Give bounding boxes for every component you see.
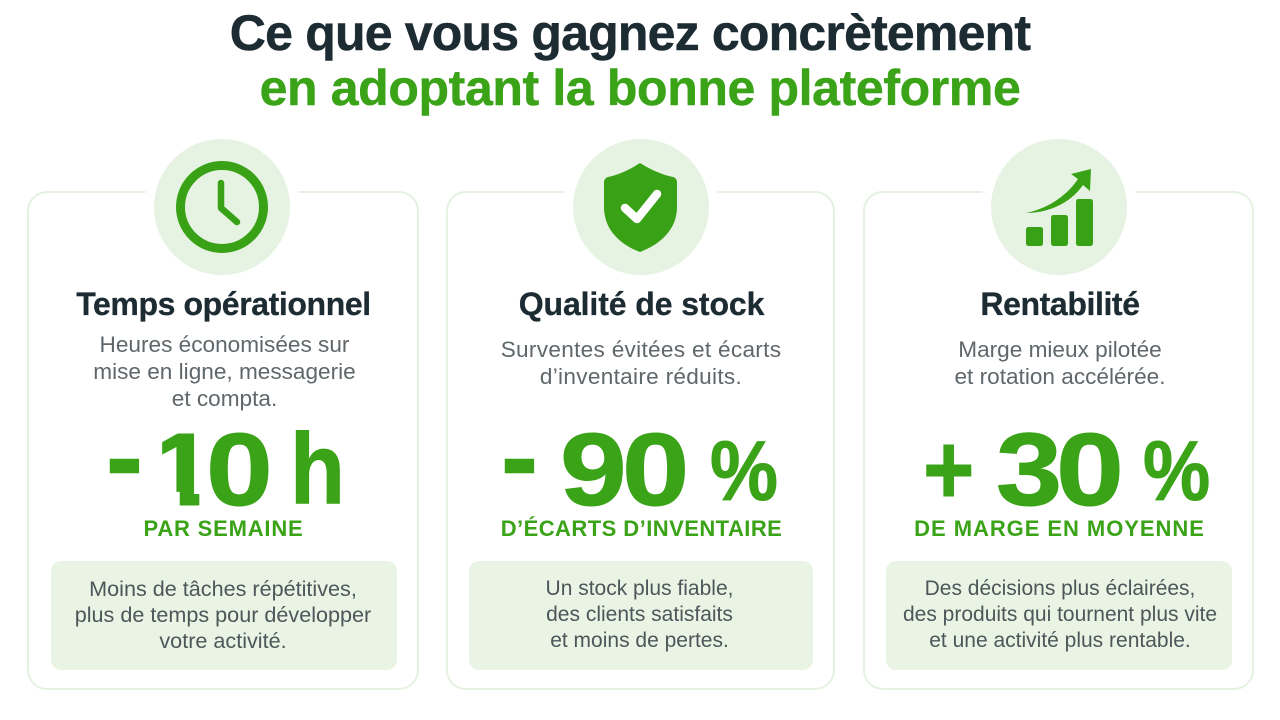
number: -90 %: 0 — [622, 412, 689, 527]
text: rentabilité description — [954, 337, 1166, 389]
callout: rentabilité — [886, 561, 1232, 670]
callout text: qualité — [546, 577, 733, 652]
text: temps description: mise en ligne, messagerie — [93, 359, 356, 384]
callout text: qualité: Un stock plus fiable, — [546, 577, 733, 600]
number: +30 %: 0 — [1056, 412, 1123, 527]
panel: rentabilité — [863, 191, 1254, 690]
number: -10 h: - — [107, 402, 142, 514]
number: +30 %: + — [923, 414, 974, 526]
text: qualité description — [501, 337, 781, 389]
panel: temps opérationnel — [27, 191, 419, 690]
number: -10 h: h — [290, 413, 344, 525]
callout text: temps — [75, 576, 371, 653]
number: -90 %: % — [710, 424, 778, 518]
icon: shield — [573, 139, 709, 275]
heading: temps opérationnel: Temps opérationnel — [76, 286, 371, 322]
icon: growth chart — [991, 139, 1127, 275]
label: écarts: D’ÉCARTS D’INVENTAIRE — [501, 516, 782, 541]
number: +30 %: 3 — [996, 412, 1062, 527]
callout text: temps: votre activité. — [159, 628, 287, 653]
title: en adoptant la bonne plateforme — [260, 60, 1020, 116]
text: rentabilité description: Marge mieux pilotée — [958, 337, 1162, 362]
text: rentabilité description: et rotation accélérée. — [954, 364, 1166, 389]
number: -10 h — [107, 402, 344, 527]
label: par semaine: PAR SEMAINE — [144, 516, 303, 541]
callout text: rentabilité: Des décisions plus éclairées, — [925, 577, 1195, 600]
number: -90 %: - — [502, 402, 537, 514]
number: -10 h: 1 — [149, 412, 216, 527]
heading: rentabilité: Rentabilité — [980, 286, 1140, 322]
callout: temps — [51, 561, 397, 670]
number: +30 %: % — [1142, 424, 1210, 518]
callout text: rentabilité: des produits qui tournent plus vite — [903, 603, 1217, 626]
callout text: rentabilité: et une activité plus rentable. — [929, 629, 1191, 652]
heading: qualité de stock: Qualité de stock — [519, 286, 764, 322]
number: -90 % — [502, 402, 778, 527]
callout text: temps: Moins de tâches répétitives, — [89, 576, 357, 601]
text: temps description: et compta. — [172, 386, 277, 411]
number: -10 h: 0 — [206, 412, 273, 527]
text: temps description: Heures économisées sur — [100, 332, 349, 357]
icon: clock — [154, 139, 290, 275]
callout text: qualité: et moins de pertes. — [550, 629, 729, 652]
text: temps description — [93, 332, 356, 411]
callout text: temps: plus de temps pour développer — [75, 602, 371, 627]
label: marge: DE MARGE EN MOYENNE — [914, 516, 1205, 541]
callout text: qualité: des clients satisfaits — [546, 603, 733, 626]
callout: qualité — [469, 561, 813, 670]
number: +30 % — [923, 412, 1210, 527]
text: qualité description: d’inventaire réduits. — [540, 364, 742, 389]
number: -90 %: 9 — [560, 412, 626, 527]
callout text: rentabilité — [903, 577, 1217, 652]
title — [230, 5, 1031, 116]
text: qualité description: Surventes évitées et écarts — [501, 337, 781, 362]
title: Ce que vous gagnez concrètement — [230, 5, 1030, 61]
panel: qualité de stock — [446, 191, 835, 690]
